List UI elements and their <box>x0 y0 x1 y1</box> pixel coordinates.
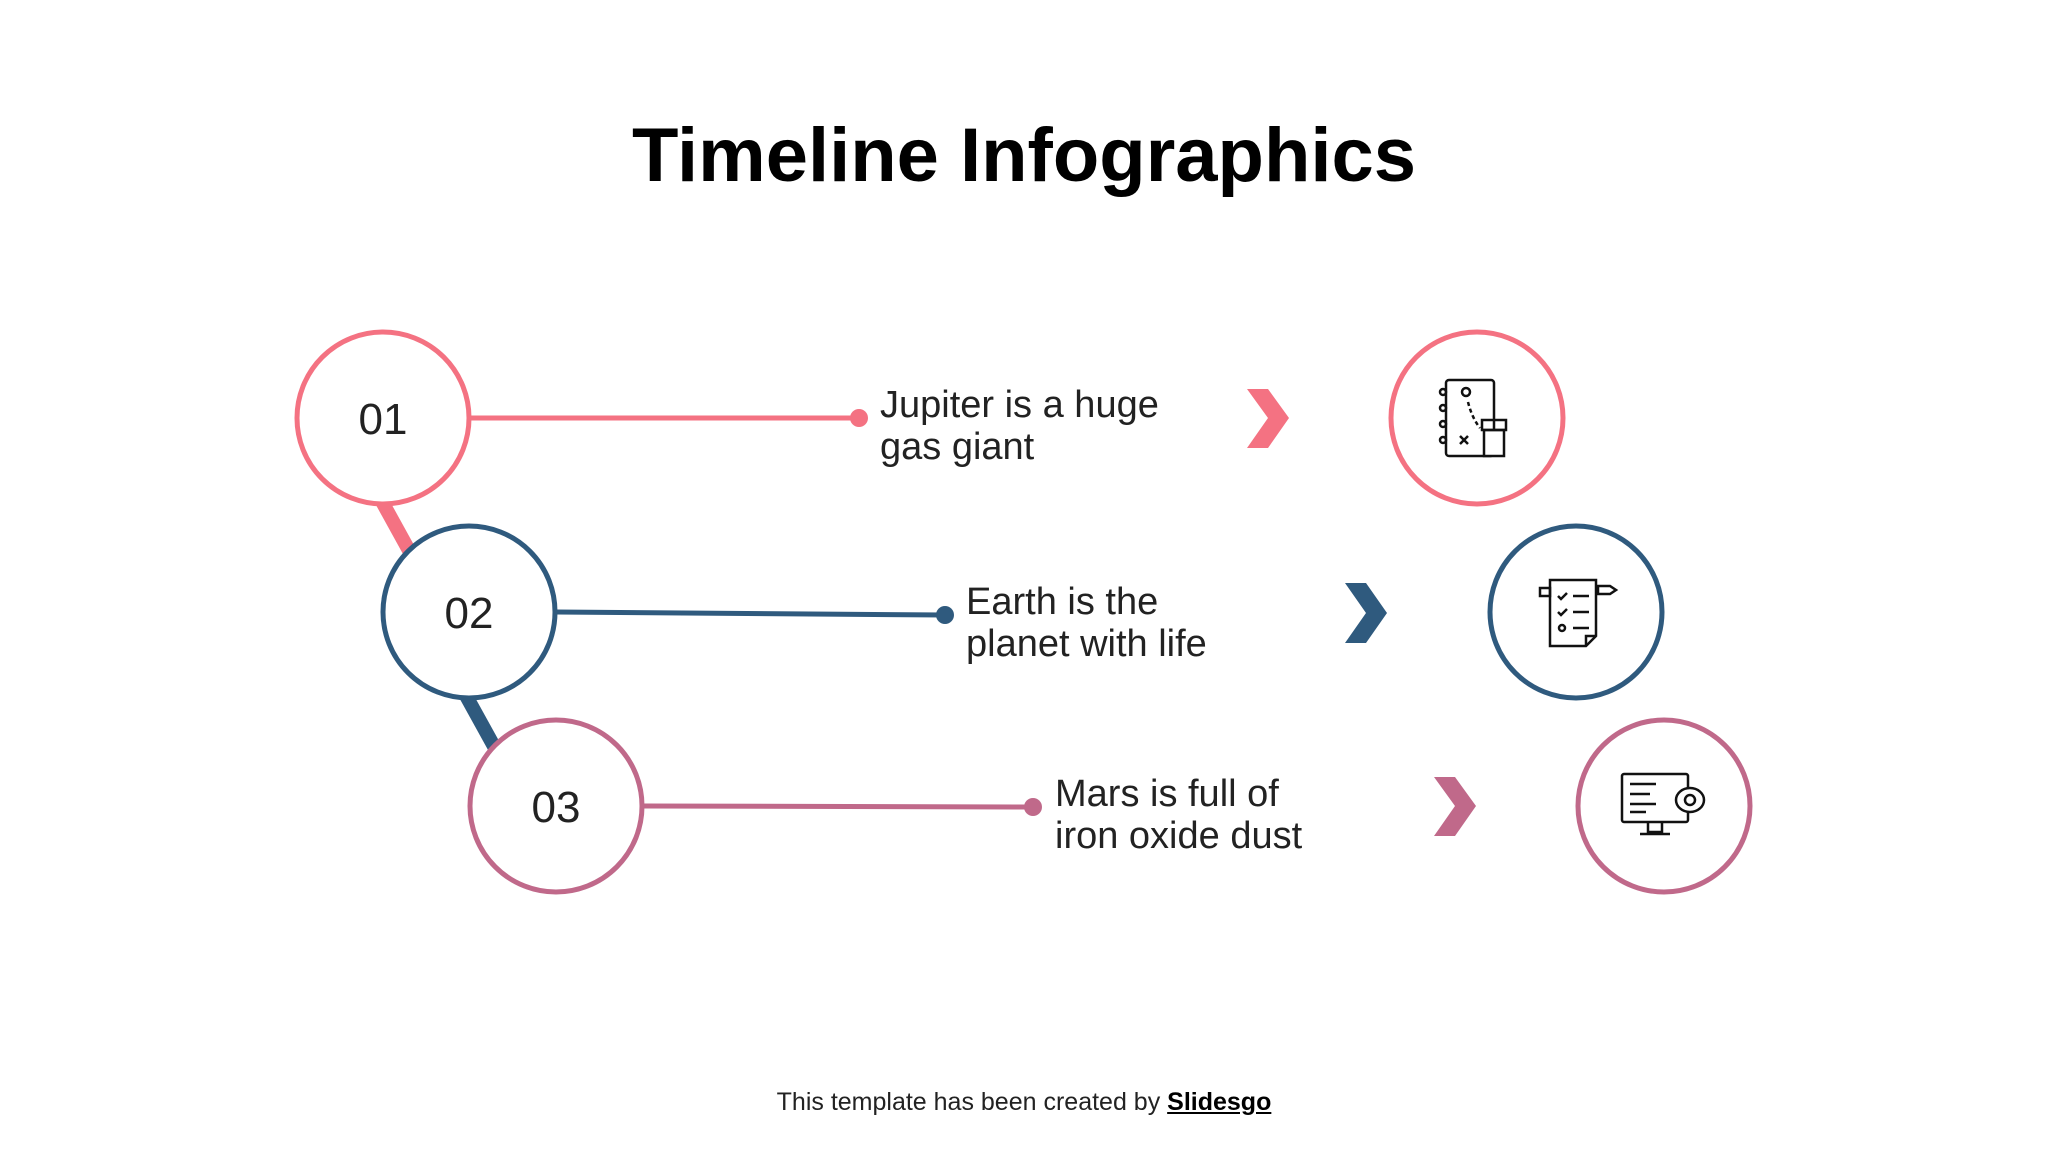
text 01 <box>880 384 1159 468</box>
step 01 <box>297 332 868 504</box>
step 03: 03 <box>532 783 580 832</box>
text 02 <box>966 581 1207 665</box>
step 02: 02 <box>445 589 493 638</box>
step 03 <box>470 720 1042 892</box>
icon circle 03: monitor with eye <box>1578 720 1750 892</box>
text 01: Jupiter is a huge <box>880 384 1159 426</box>
chevron 02 <box>1345 583 1387 643</box>
text 02: planet with life <box>966 623 1207 665</box>
icon circle 02: checklist <box>1490 526 1662 698</box>
text 01: gas giant <box>880 426 1034 468</box>
connector 02-03 <box>464 692 522 797</box>
footer: This template has been created by Slidesgo <box>777 1088 1271 1116</box>
chevron 03 <box>1434 777 1476 836</box>
text 03: iron oxide dust <box>1055 815 1302 857</box>
step 01: 01 <box>359 395 407 444</box>
connector 01-02 <box>379 496 444 614</box>
text 02: Earth is the <box>966 581 1158 623</box>
chevron 01 <box>1247 389 1289 448</box>
icon circle 01: strategy <box>1391 332 1563 504</box>
text 03: Mars is full of <box>1055 773 1279 815</box>
title: Timeline Infographics <box>632 113 1416 198</box>
text 03 <box>1055 773 1302 857</box>
step 02 <box>383 526 954 698</box>
